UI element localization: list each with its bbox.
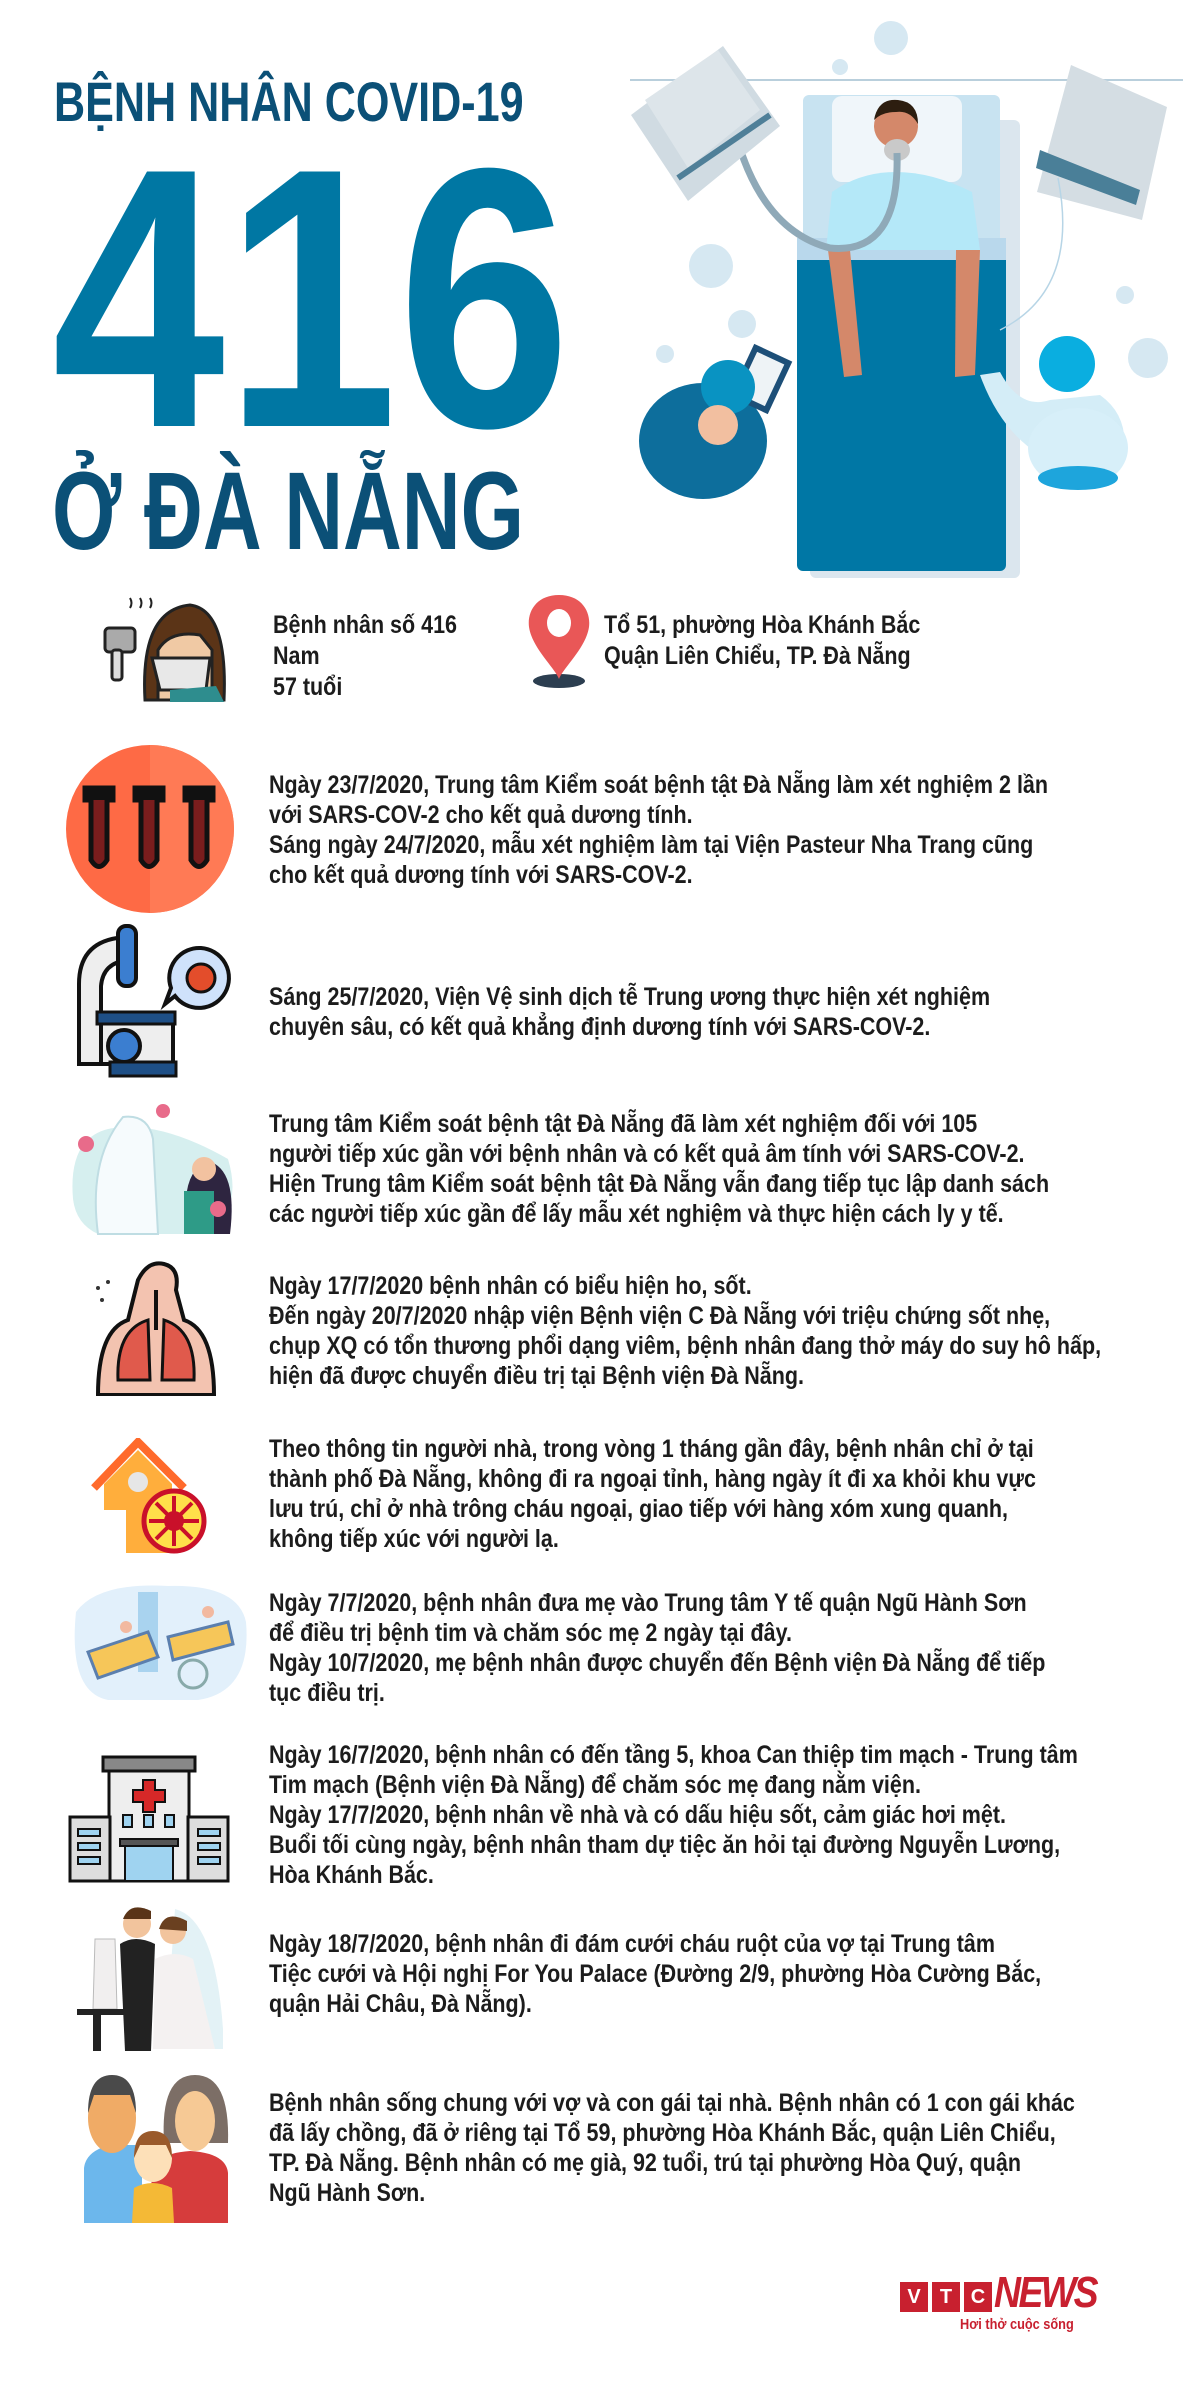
icon: test tubes circle <box>66 745 234 913</box>
icon: hospital building <box>68 1756 230 1882</box>
text: Theo thông tin người nhà, trong vòng 1 tháng gần đây, bệnh nhân chỉ ở tại <box>269 1435 1034 1463</box>
icon: bride and groom with cake <box>77 1907 223 2051</box>
text: người tiếp xúc gần với bệnh nhân và có kết quả âm tính với SARS-COV-2. <box>269 1140 1025 1168</box>
text: với SARS-COV-2 cho kết quả dương tính. <box>269 801 693 829</box>
text: hiện đã được chuyển điều trị tại Bệnh viện Đà Nẵng. <box>269 1362 804 1390</box>
text: Đến ngày 20/7/2020 nhập viện Bệnh viện C Đà Nẵng với triệu chứng sốt nhẹ, <box>269 1302 1050 1330</box>
text: Tim mạch (Bệnh viện Đà Nẵng) để chăm sóc mẹ đang nằm viện. <box>269 1771 921 1799</box>
text <box>269 2089 1075 2207</box>
icon: location pin <box>528 595 590 688</box>
row 4: lungs <box>96 1261 1101 1396</box>
text: address: Quận Liên Chiểu, TP. Đà Nẵng <box>604 642 911 670</box>
logo word NEWS: NEWS <box>994 2268 1096 2317</box>
text: thành phố Đà Nẵng, không đi ra ngoại tỉnh, hàng ngày ít đi xa khỏi khu vực <box>269 1465 1036 1493</box>
text: address: Tổ 51, phường Hòa Khánh Bắc <box>604 611 920 639</box>
text: Hòa Khánh Bắc. <box>269 1861 434 1889</box>
text: quận Hải Châu, Đà Nẵng). <box>269 1990 532 2018</box>
logo boxes VTC: V <box>907 2286 921 2308</box>
row 1: test tubes <box>66 745 1048 913</box>
big number 416: 416 <box>52 92 571 505</box>
text: TP. Đà Nẵng. Bệnh nhân có mẹ già, 92 tuổi, trú tại phường Hòa Quý, quận <box>269 2149 1021 2177</box>
text: lưu trú, chỉ ở nhà trông cháu ngoại, giao tiếp với hàng xóm xung quanh, <box>269 1495 1008 1523</box>
text: Ngày 23/7/2020, Trung tâm Kiểm soát bệnh tật Đà Nẵng làm xét nghiệm 2 lần <box>269 771 1048 799</box>
row 7: hospital building <box>68 1741 1078 1889</box>
text: không tiếp xúc với người lạ. <box>269 1525 559 1553</box>
text: Hiện Trung tâm Kiểm soát bệnh tật Đà Nẵng vẫn đang tiếp tục lập danh sách <box>269 1170 1049 1198</box>
viruses <box>656 21 1168 378</box>
text: patient info <box>273 611 457 701</box>
text: tục điều trị. <box>269 1679 385 1707</box>
icon: infected lungs <box>96 1261 216 1396</box>
left doctor <box>639 383 767 499</box>
text: Bệnh nhân sống chung với vợ và con gái tại nhà. Bệnh nhân có 1 con gái khác <box>269 2089 1075 2117</box>
text: address <box>604 610 920 670</box>
icon: house with virus <box>91 1438 206 1554</box>
right monitor <box>1037 65 1167 220</box>
tagline: Hơi thở cuộc sống <box>960 2316 1074 2333</box>
text: Tiệc cưới và Hội nghị For You Palace (Đường 2/9, phường Hòa Cường Bắc, <box>269 1960 1041 1988</box>
row 2: microscope <box>77 924 990 1078</box>
text: Sáng 25/7/2020, Viện Vệ sinh dịch tễ Trung ương thực hiện xét nghiệm <box>269 983 990 1011</box>
icon: family <box>84 2075 228 2223</box>
icon: man with thermometer <box>104 598 226 702</box>
text: patient info: Nam <box>273 642 320 670</box>
text <box>269 1741 1078 1889</box>
logo boxes VTC <box>900 2282 992 2312</box>
text: để điều trị bệnh tim và chăm sóc mẹ 2 ngày tại đây. <box>269 1619 792 1647</box>
text: Sáng ngày 24/7/2020, mẫu xét nghiệm làm tại Viện Pasteur Nha Trang cũng <box>269 831 1033 859</box>
text <box>269 1272 1101 1390</box>
ventilator tube <box>734 128 897 248</box>
text <box>269 1589 1045 1707</box>
patient <box>826 172 980 250</box>
text <box>269 1109 1049 1228</box>
title: BỆNH NHÂN COVID-19: BỆNH NHÂN COVID-19 <box>54 70 524 133</box>
logo: VTC NEWS <box>900 2268 1098 2333</box>
text: Trung tâm Kiểm soát bệnh tật Đà Nẵng đã làm xét nghiệm đối với 105 <box>269 1110 977 1138</box>
text: Ngày 16/7/2020, bệnh nhân có đến tầng 5, khoa Can thiệp tim mạch - Trung tâm <box>269 1741 1078 1769</box>
text <box>269 1435 1036 1553</box>
info row <box>104 595 920 702</box>
logo boxes VTC: T <box>940 2286 952 2308</box>
icon: doctor swabbing woman <box>72 1104 232 1235</box>
text: Buổi tối cùng ngày, bệnh nhân tham dự tiệc ăn hỏi tại đường Nguyễn Lương, <box>269 1831 1060 1859</box>
logo boxes VTC: C <box>971 2286 985 2308</box>
text: Ngày 7/7/2020, bệnh nhân đưa mẹ vào Trung tâm Y tế quận Ngũ Hành Sơn <box>269 1589 1027 1617</box>
text: Ngày 17/7/2020, bệnh nhân về nhà và có dấu hiệu sốt, cảm giác hơi mệt. <box>269 1801 1006 1829</box>
text: patient info: 57 tuổi <box>273 673 342 701</box>
row 5: house <box>91 1435 1036 1554</box>
text: các người tiếp xúc gần để lấy mẫu xét nghiệm và thực hiện cách ly y tế. <box>269 1200 1004 1228</box>
row 9: family <box>84 2075 1075 2223</box>
text: Ngũ Hành Sơn. <box>269 2179 425 2207</box>
bed <box>810 120 1020 578</box>
text: patient info: Bệnh nhân số 416 <box>273 611 457 639</box>
text: chuyên sâu, có kết quả khẳng định dương tính với SARS-COV-2. <box>269 1013 930 1041</box>
text: chụp XQ có tổn thương phổi dạng viêm, bệnh nhân đang thở máy do suy hô hấp, <box>269 1332 1101 1360</box>
illustration: patient on ventilator with doctors <box>630 21 1183 578</box>
text <box>269 770 1048 889</box>
text: Ngày 10/7/2020, mẹ bệnh nhân được chuyển đến Bệnh viện Đà Nẵng để tiếp <box>269 1649 1045 1677</box>
right doctor <box>980 372 1124 470</box>
text: Ngày 18/7/2020, bệnh nhân đi đám cưới cháu ruột của vợ tại Trung tâm <box>269 1930 995 1958</box>
subtitle: Ở ĐÀ NẴNG: Ở ĐÀ NẴNG <box>52 450 524 573</box>
text: Ngày 17/7/2020 bệnh nhân có biểu hiện ho, sốt. <box>269 1272 752 1300</box>
row 3: swab test <box>72 1104 1049 1235</box>
text <box>269 982 990 1041</box>
text: đã lấy chồng, đã ở riêng tại Tổ 59, phường Hòa Khánh Bắc, quận Liên Chiểu, <box>269 2119 1056 2147</box>
row 8: wedding <box>77 1907 1041 2051</box>
icon: microscope with virus <box>77 924 231 1078</box>
text <box>269 1930 1041 2018</box>
left monitor <box>631 46 780 201</box>
icon: hospital ward illustration <box>74 1586 246 1700</box>
text: cho kết quả dương tính với SARS-COV-2. <box>269 861 693 889</box>
row 6: hospital ward scene <box>74 1586 1045 1707</box>
